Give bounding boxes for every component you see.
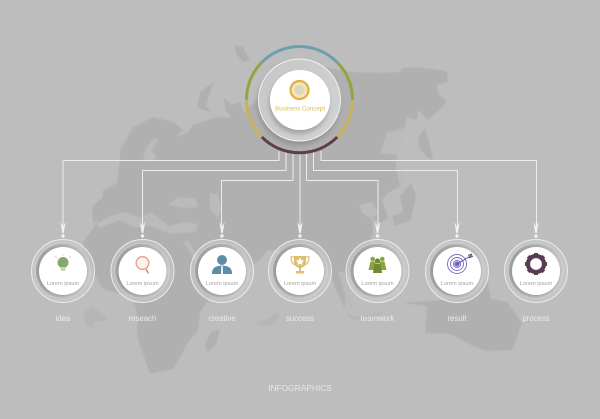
node: teamwork: Lorem ipsum [361, 281, 394, 287]
footer title: INFOGRAPHICS [268, 383, 332, 393]
icon: target [448, 254, 473, 274]
central label: Business Concept [275, 106, 325, 112]
node: process: Lorem ipsum [520, 281, 552, 287]
icon: gear [525, 253, 547, 275]
label: result: result [447, 314, 467, 323]
icon: light bulb [55, 254, 71, 271]
arrows [60, 222, 539, 238]
label: teamwork: teamwork [361, 314, 394, 323]
node: creative [190, 240, 254, 302]
node: reseach: Lorem ipsum [126, 281, 159, 287]
node: success: Lorem ipsum [284, 281, 316, 287]
node: success [268, 240, 332, 302]
label: success: success [286, 314, 314, 323]
node: idea: Lorem ipsum [47, 281, 79, 287]
node: creative: Lorem ipsum [206, 281, 238, 287]
node: result: Lorem ipsum [441, 281, 473, 287]
node: result [426, 240, 488, 302]
label: idea: idea [56, 314, 71, 323]
label: reseach: reseach [129, 314, 156, 323]
central business concept node [246, 47, 353, 153]
icon: magnifier [136, 257, 149, 274]
seas [96, 128, 405, 311]
world map [83, 45, 522, 374]
node: reseach [111, 240, 174, 302]
node: teamwork [346, 240, 409, 302]
icon: trophy [291, 256, 309, 274]
label: process: process [522, 314, 550, 323]
icon: team [368, 257, 386, 273]
colored ring segments [246, 47, 353, 153]
icon: person [212, 255, 232, 274]
icon: globe badge [290, 81, 308, 99]
label: creative: creative [208, 314, 236, 323]
node: process [504, 240, 568, 302]
node: idea [32, 240, 94, 302]
connector lines [63, 151, 536, 226]
